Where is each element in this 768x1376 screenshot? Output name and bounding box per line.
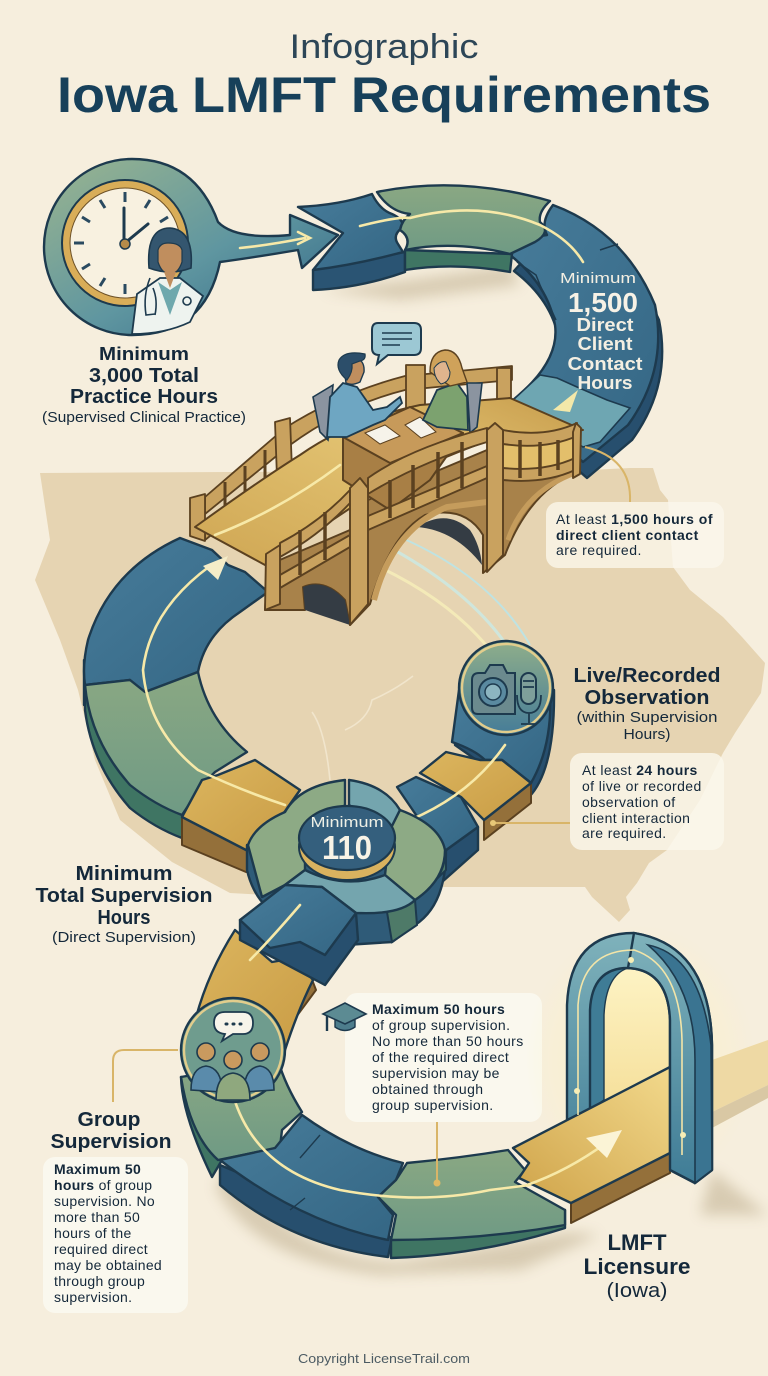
segment: green bottom	[378, 1150, 565, 1258]
label: total practice hours: Practice Hours	[70, 386, 218, 408]
segment: blue bottom	[220, 1115, 403, 1257]
callout: group supervision detail: more than 50	[54, 1209, 140, 1225]
segment: blue right of hub	[397, 777, 478, 882]
segment: green arc	[377, 185, 550, 272]
icon: graduation cap	[323, 1003, 366, 1031]
callout: maximum group supervision: group supervision.	[372, 1097, 494, 1113]
arch openings	[417, 518, 482, 565]
callout: maximum group supervision: of group supervision.	[372, 1017, 510, 1033]
arch frame back leg	[567, 933, 712, 1183]
callout: group supervision detail: required direct	[54, 1241, 148, 1257]
segment: blue below observation	[452, 690, 554, 797]
hub: minimum 110 supervision hours: Minimum	[310, 814, 384, 831]
text on path: 1,500 direct client contact hours: Minimum	[560, 270, 636, 287]
bridge body and arches	[265, 430, 580, 625]
callout: group supervision detail: supervision. No	[54, 1193, 155, 1209]
label: LMFT licensure: (Iowa)	[606, 1280, 668, 1302]
label: group supervision: Supervision	[50, 1131, 172, 1153]
camera	[472, 665, 515, 714]
text on path: 1,500 direct client contact hours	[560, 270, 643, 393]
callout: group supervision detail: through group	[54, 1273, 145, 1289]
label: LMFT licensure: LMFT	[608, 1230, 667, 1255]
back railing	[190, 365, 512, 541]
label: total practice hours: (Supervised Clinical Practice)	[42, 409, 246, 426]
path: top ribbon	[298, 185, 662, 478]
hub: minimum 110 supervision hours	[247, 780, 446, 945]
segment: gold left	[182, 760, 300, 872]
label: live or recorded observation: Hours)	[624, 726, 670, 743]
text on path: 1,500 direct client contact hours: Contact	[568, 354, 643, 374]
callout: observation hours: observation of	[582, 794, 676, 810]
path: lower ribbon	[181, 885, 565, 1258]
segment: gold lower	[190, 930, 316, 1050]
arch doorway	[590, 968, 670, 1150]
speech bubble	[214, 1012, 253, 1041]
person: man counselor	[313, 353, 402, 440]
road beyond arch	[712, 1040, 768, 1112]
label: minimum total supervision hours: (Direct Supervision)	[52, 929, 196, 946]
label: live or recorded observation	[574, 665, 720, 743]
segment: blue curve with hours	[510, 205, 662, 478]
path shadow	[215, 265, 768, 1275]
label: total practice hours: Minimum	[99, 343, 189, 364]
hub: minimum 110 supervision hours: 110	[322, 829, 372, 866]
icon: clock and clinician badge	[44, 159, 338, 335]
leader line: observation	[490, 820, 570, 826]
label: group supervision: Group	[78, 1109, 140, 1131]
group people	[191, 1043, 274, 1100]
halo	[525, 925, 755, 1195]
label: total practice hours: 3,000 Total	[89, 365, 199, 387]
text on path: 1,500 direct client contact hours: 1,500	[568, 287, 638, 318]
inner side of arch	[590, 968, 628, 1110]
callout: group supervision detail	[43, 1157, 188, 1313]
segment: blue below hub	[240, 885, 358, 985]
path: right segments to observation	[397, 690, 554, 882]
callout: group supervision detail: Maximum 50	[54, 1161, 141, 1177]
text on path: 1,500 direct client contact hours: Hours	[578, 373, 632, 393]
leader line: group supervision note	[434, 1122, 440, 1186]
front railing	[265, 423, 581, 625]
callout: direct client contact	[546, 502, 724, 568]
callout: observation hours: are required.	[582, 825, 667, 841]
arch right leg	[574, 933, 712, 1183]
state river lines	[312, 676, 413, 780]
icon: speech bubble	[372, 323, 421, 364]
person: woman client	[423, 350, 482, 433]
under-bridge light swooshes	[375, 535, 530, 650]
label: group supervision	[50, 1109, 172, 1153]
title: Infographic	[290, 28, 478, 66]
callout: maximum group supervision: Maximum 50 hours	[372, 1001, 505, 1017]
callout: observation hours	[570, 753, 724, 850]
leader line: group supervision	[113, 1050, 178, 1102]
label: live or recorded observation: (within Supervision	[576, 709, 718, 726]
callout: maximum group supervision: supervision may be	[372, 1065, 500, 1081]
callout: group supervision detail: may be obtained	[54, 1257, 162, 1273]
bridge deck	[195, 398, 583, 565]
label: live or recorded observation: Live/Recorded	[574, 665, 720, 687]
title	[57, 28, 711, 123]
icon: observation camera and microphone	[459, 641, 553, 735]
callout: group supervision detail: hours of the	[54, 1225, 132, 1241]
text on path: 1,500 direct client contact hours: Direct	[576, 315, 634, 335]
hub petals	[248, 780, 445, 913]
path: left ring	[84, 538, 300, 872]
segment: green lower	[181, 1060, 302, 1177]
text on path: 1,500 direct client contact hours: Client	[578, 334, 632, 354]
label: live or recorded observation: Observation	[584, 687, 710, 709]
segment: blue arrow socket	[298, 194, 405, 290]
callout: maximum group supervision	[345, 993, 542, 1122]
callout: direct client contact: At least 1,500 hours of	[556, 511, 713, 527]
bridge with counseling session	[190, 323, 583, 625]
licensure archway	[525, 925, 768, 1195]
label: minimum total supervision hours: Hours	[98, 907, 150, 929]
segment: blue upper left	[84, 538, 268, 710]
callout: group supervision detail: supervision.	[54, 1289, 132, 1305]
callout: maximum group supervision: of the required direct	[372, 1049, 509, 1065]
label: total practice hours	[42, 343, 246, 426]
icon: group supervision badge	[181, 998, 285, 1102]
callout: observation hours: client interaction	[582, 810, 690, 826]
callout: group supervision detail: hours of group	[54, 1177, 152, 1193]
label: LMFT licensure	[584, 1230, 690, 1302]
callout: direct client contact: direct client contact	[556, 527, 699, 543]
callout: observation hours: At least 24 hours	[582, 762, 698, 778]
footer copyright: Copyright LicenseTrail.com	[298, 1351, 470, 1366]
icon: arrow along ring	[203, 556, 228, 580]
icon: clinician	[132, 228, 203, 334]
label: LMFT licensure: Licensure	[584, 1254, 690, 1279]
label: minimum total supervision hours: Total Supervision	[36, 885, 212, 907]
icon: clock face	[62, 180, 188, 306]
icon: arrow into arch	[586, 1130, 622, 1158]
title: Iowa LMFT Requirements	[57, 67, 711, 123]
segment: gold right	[420, 752, 531, 840]
microphone	[517, 673, 541, 724]
segment: gold road into arch	[513, 1067, 670, 1223]
icon: arrow into bridge	[553, 390, 578, 412]
label: minimum total supervision hours: Minimum	[76, 863, 172, 885]
callout: maximum group supervision: No more than 50 hours	[372, 1033, 524, 1049]
callout: direct client contact: are required.	[556, 542, 642, 558]
leader line: direct client contact	[585, 447, 630, 502]
segment: green left	[85, 672, 247, 838]
deck highlight	[215, 465, 340, 535]
session table	[343, 407, 463, 510]
map of Iowa	[35, 468, 765, 922]
callout: maximum group supervision: obtained through	[372, 1081, 484, 1097]
callout: observation hours: of live or recorded	[582, 778, 702, 794]
label: minimum total supervision hours	[36, 863, 212, 946]
